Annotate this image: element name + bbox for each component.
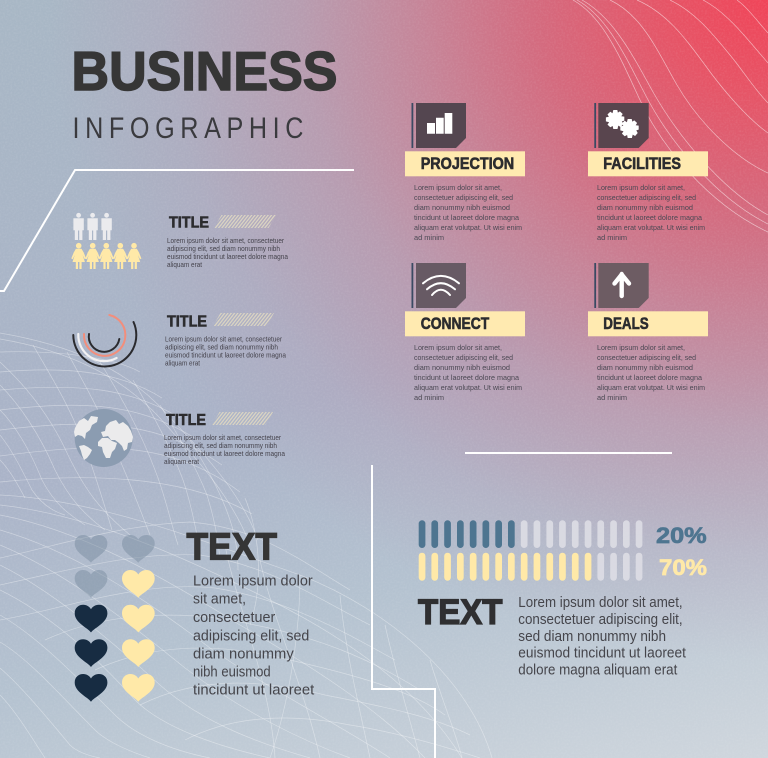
panel: facilities: FACILITIES bbox=[603, 155, 681, 173]
text block: left paragraph: tincidunt ut laoreet bbox=[193, 683, 314, 699]
icon: wifi bbox=[412, 263, 466, 308]
heading: right TEXT: TEXT bbox=[418, 593, 502, 632]
text block: left paragraph bbox=[193, 573, 314, 699]
block: title 3: Lorem ipsum dolor sit amet, consectetuer bbox=[164, 433, 281, 442]
panel: connect: Lorem ipsum dolor sit amet, bbox=[414, 343, 502, 352]
panel: projection: Lorem ipsum dolor sit amet, bbox=[414, 183, 502, 192]
panel: connect: tincidunt ut laoreet dolore magna bbox=[414, 373, 520, 382]
panel: deals bbox=[588, 263, 708, 402]
block: title 2: Lorem ipsum dolor sit amet, consectetuer bbox=[165, 334, 282, 344]
panel: connect: consectetuer adipiscing elit, sed bbox=[414, 353, 513, 362]
label: 70%: 70% bbox=[659, 555, 707, 580]
heading: left TEXT: TEXT bbox=[186, 526, 277, 568]
panel: projection: consectetuer adipiscing elit, sed bbox=[414, 193, 513, 202]
icon: concentric arcs bbox=[73, 315, 136, 366]
panel: projection: diam nonummy nibh euismod bbox=[414, 203, 510, 212]
text block: left paragraph: sit amet, bbox=[193, 592, 246, 608]
panel: facilities: Lorem ipsum dolor sit amet, bbox=[597, 183, 685, 192]
icon: arrow up bbox=[594, 263, 649, 308]
panel: facilities: tincidunt ut laoreet dolore magna bbox=[597, 213, 703, 222]
chart: heart rating bbox=[75, 535, 155, 702]
panel: projection: tincidunt ut laoreet dolore magna bbox=[414, 213, 520, 222]
block: title 1: euismod tincidunt ut laoreet dolore magna bbox=[167, 252, 289, 261]
block: title 2: aliquam erat bbox=[165, 358, 201, 368]
text block: left paragraph: adipiscing elit, sed bbox=[193, 628, 309, 644]
label: 20%: 20% bbox=[656, 523, 707, 548]
panel: connect: diam nonummy nibh euismod bbox=[414, 363, 510, 372]
panel: connect: aliquam erat volutpat. Ut wisi enim bbox=[414, 383, 522, 392]
block: title 2: euismod tincidunt ut laoreet dolore magna bbox=[165, 350, 287, 360]
divider: top left line bbox=[0, 170, 354, 291]
text block: left paragraph: consectetuer bbox=[193, 610, 275, 626]
text block: right paragraph: consectetuer adipiscing elit, bbox=[518, 612, 683, 628]
text block: right paragraph: Lorem ipsum dolor sit amet, bbox=[518, 595, 683, 611]
block: title 3 bbox=[164, 412, 286, 466]
text block: right paragraph bbox=[518, 595, 686, 679]
block: title 1: TITLE bbox=[169, 215, 209, 232]
block: title 1: adipiscing elit, sed diam nonummy nibh bbox=[167, 244, 280, 253]
block: title 1: Lorem ipsum dolor sit amet, consectetuer bbox=[167, 236, 284, 245]
panel: projection: ad minim bbox=[414, 233, 444, 242]
block: title 3: euismod tincidunt ut laoreet dolore magna bbox=[164, 449, 286, 458]
block: title 1: aliquam erat bbox=[167, 260, 203, 269]
divider: bottom stepped line bbox=[372, 465, 435, 758]
chart: 70% pill bar bbox=[419, 553, 642, 581]
panel: deals: DEALS bbox=[603, 315, 649, 333]
panel: deals: ad minim bbox=[597, 393, 627, 402]
title: BUSINESS: BUSINESS bbox=[72, 40, 338, 102]
panel: connect bbox=[405, 263, 525, 402]
panel: facilities: ad minim bbox=[597, 233, 627, 242]
text block: right paragraph: dolore magna aliquam erat bbox=[518, 663, 677, 679]
panel: deals: aliquam erat volutpat. Ut wisi enim bbox=[597, 383, 705, 392]
block: title 2: adipiscing elit, sed diam nonummy nibh bbox=[165, 342, 278, 352]
mesh: bottom left wireframe bbox=[0, 333, 492, 758]
icon: gears bbox=[594, 103, 649, 148]
panel: deals: consectetuer adipiscing elit, sed bbox=[597, 353, 696, 362]
panel: deals: tincidunt ut laoreet dolore magna bbox=[597, 373, 703, 382]
chart: 20% pill bar bbox=[419, 520, 642, 548]
text block: left paragraph: nibh euismod bbox=[193, 665, 271, 681]
icon: bar chart bbox=[412, 103, 466, 148]
block: title 1 bbox=[167, 215, 289, 269]
block: title 2 bbox=[165, 313, 287, 368]
panel: facilities: consectetuer adipiscing elit, sed bbox=[597, 193, 696, 202]
panel: projection bbox=[405, 103, 525, 242]
subtitle: INFOGRAPHIC: INFOGRAPHIC bbox=[72, 111, 304, 145]
panel: facilities bbox=[588, 103, 708, 242]
panel: projection: aliquam erat volutpat. Ut wisi enim bbox=[414, 223, 522, 232]
text block: right paragraph: sed diam nonummy nibh bbox=[518, 629, 666, 645]
panel: deals: Lorem ipsum dolor sit amet, bbox=[597, 343, 685, 352]
panel: connect: CONNECT bbox=[421, 315, 489, 333]
text block: left paragraph: diam nonummy bbox=[193, 646, 294, 662]
panel: projection: PROJECTION bbox=[421, 155, 514, 173]
block: title 3: adipiscing elit, sed diam nonummy nibh bbox=[164, 441, 277, 450]
block: title 2: TITLE bbox=[167, 313, 207, 330]
icon: people bbox=[71, 213, 141, 269]
icon: globe bbox=[74, 409, 133, 467]
block: title 3: TITLE bbox=[166, 412, 206, 429]
block: title 3: aliquam erat bbox=[164, 457, 200, 466]
text block: left paragraph: Lorem ipsum dolor bbox=[193, 573, 313, 589]
panel: connect: ad minim bbox=[414, 393, 444, 402]
divider: right short line bbox=[465, 452, 672, 454]
panel: facilities: diam nonummy nibh euismod bbox=[597, 203, 693, 212]
text block: right paragraph: euismod tincidunt ut laoreet bbox=[518, 646, 686, 662]
wave lines: top right bbox=[573, 0, 768, 232]
panel: deals: diam nonummy nibh euismod bbox=[597, 363, 693, 372]
panel: facilities: aliquam erat volutpat. Ut wisi enim bbox=[597, 223, 705, 232]
